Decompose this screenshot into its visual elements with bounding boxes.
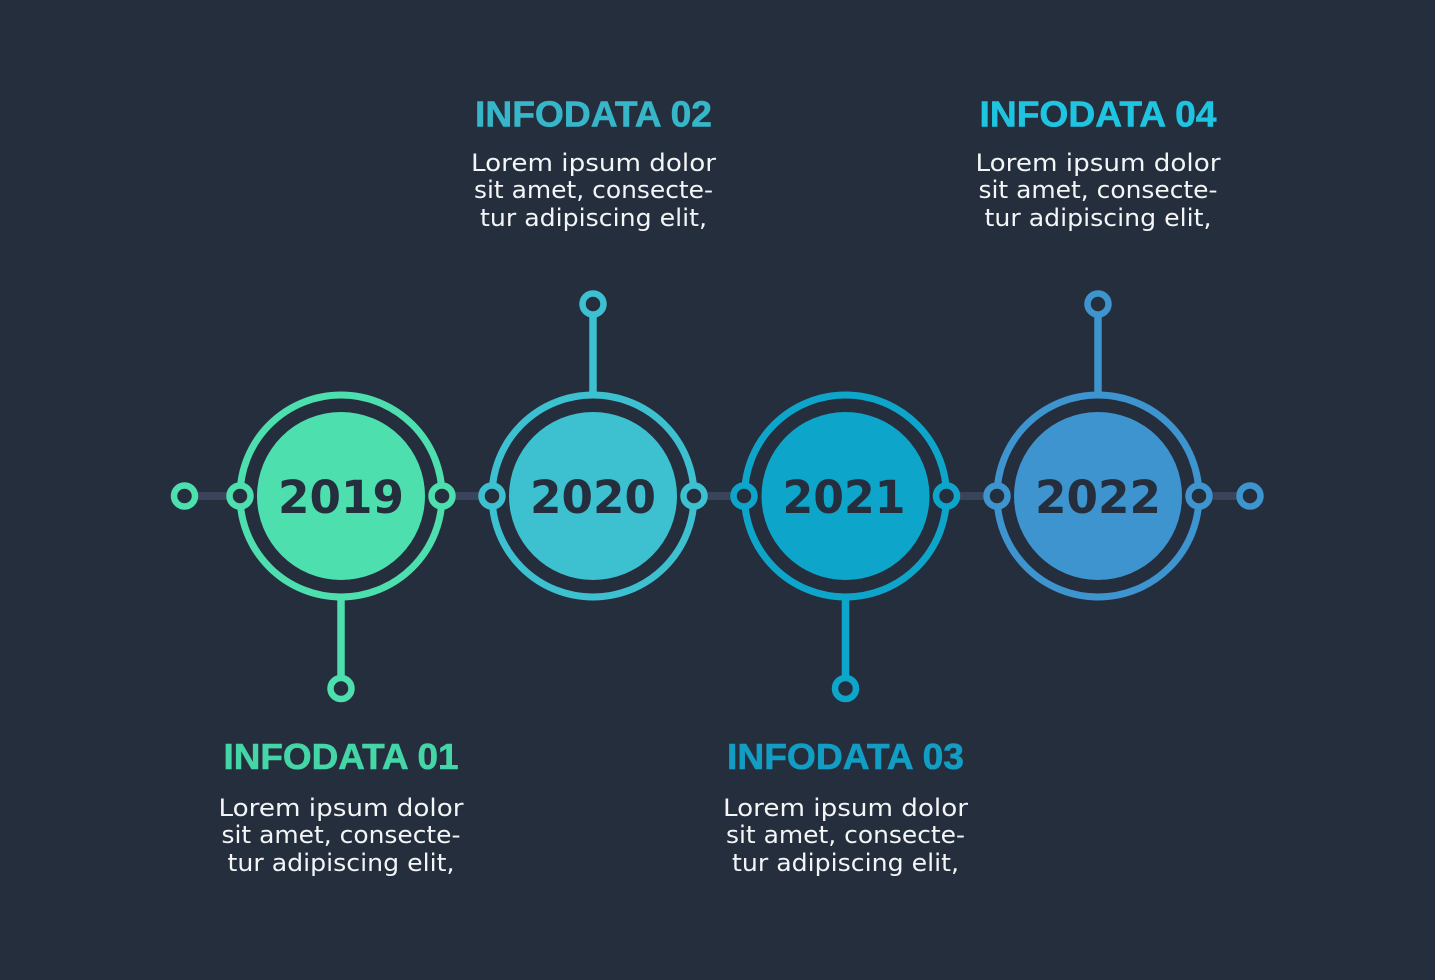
text block: Infodata 03: Lorem ipsum dolor: [723, 794, 968, 822]
heading: Infodata 01: INFODATA 01: [224, 736, 458, 777]
year 2020: 2020: [530, 471, 656, 524]
text block: Infodata 03: [723, 736, 968, 877]
text block: Infodata 02: [471, 94, 716, 232]
text block: Infodata 03: tur adipiscing elit,: [732, 849, 959, 877]
text block: Infodata 03: sit amet, consecte-: [726, 821, 965, 849]
text block: Infodata 01: [218, 736, 464, 877]
text block: Infodata 04: tur adipiscing elit,: [984, 204, 1212, 232]
heading: Infodata 02: INFODATA 02: [475, 94, 712, 134]
text block: Infodata 02: tur adipiscing elit,: [480, 204, 707, 232]
text block: Infodata 04: sit amet, consecte-: [978, 176, 1218, 204]
heading: Infodata 04: INFODATA 04: [980, 94, 1216, 134]
step 2022: [986, 294, 1260, 597]
filled disc 2022: [1014, 412, 1182, 580]
text block: Infodata 04: Lorem ipsum dolor: [976, 149, 1221, 177]
timeline connector line: [185, 492, 1250, 500]
filled disc 2021: [762, 412, 930, 580]
text block: Infodata 01: tur adipiscing elit,: [228, 849, 454, 877]
year 2022: 2022: [1035, 471, 1161, 524]
text block: Infodata 04: [976, 94, 1221, 232]
filled disc 2020: [509, 412, 677, 580]
text block: Infodata 01: sit amet, consecte-: [222, 821, 460, 849]
step 2019: [174, 395, 452, 699]
text block: Infodata 02: sit amet, consecte-: [474, 176, 713, 204]
year 2021: 2021: [782, 471, 906, 524]
year 2019: 2019: [278, 471, 404, 524]
step 2020: [482, 294, 704, 597]
step 2021: [734, 395, 957, 699]
filled disc 2019: [257, 412, 425, 580]
heading: Infodata 03: INFODATA 03: [727, 736, 964, 777]
text block: Infodata 02: Lorem ipsum dolor: [471, 149, 716, 177]
text block: Infodata 01: Lorem ipsum dolor: [218, 794, 464, 822]
